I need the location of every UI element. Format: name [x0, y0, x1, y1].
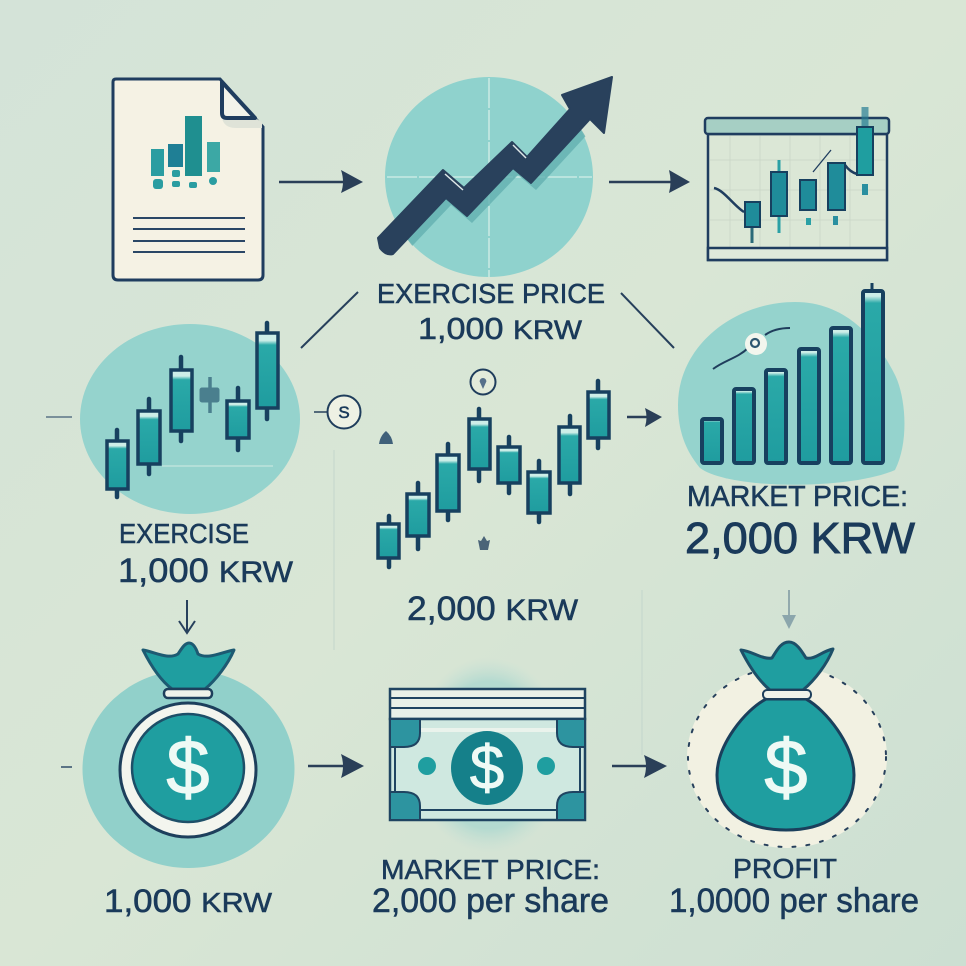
note corners	[390, 719, 585, 820]
connector line left	[301, 292, 358, 348]
panel: market price bar chart	[678, 283, 904, 485]
text: exercise price 1,000 KRW: 1,000 KRW	[418, 311, 583, 346]
squiggle with badge	[713, 328, 790, 369]
candlestick chart middle	[378, 381, 609, 567]
panel: left candlestick circle	[80, 323, 300, 514]
text: market price per share: MARKET PRICE:	[381, 854, 600, 885]
arrow: bill to profit	[612, 755, 667, 778]
icon: small bell	[379, 431, 393, 444]
panel: growth arrow circle	[378, 77, 612, 277]
icon: rising arrow	[378, 77, 612, 254]
connector line right	[621, 293, 674, 348]
text: exercise price 1,000 KRW	[377, 278, 605, 346]
text: profit per share: 1,0000 per share	[669, 882, 919, 920]
board candlesticks	[745, 107, 873, 243]
dollar sign: $	[470, 734, 504, 803]
text: exercise 1,000 KRW: 1,000 KRW	[118, 552, 294, 590]
text: market price 2,000 KRW	[685, 481, 915, 563]
dollar sign: $	[166, 723, 210, 811]
text: profit per share	[669, 853, 919, 920]
dollar sign: $	[764, 723, 808, 811]
panel: coin money bag	[82, 643, 294, 868]
arrow: growth to chart	[609, 170, 690, 193]
arrow: middle chart to bars	[627, 408, 662, 427]
dash left of row two	[46, 416, 72, 418]
panel: candlestick board	[705, 107, 889, 260]
icon: dollar coin badge: S	[338, 403, 350, 422]
text: exercise price 1,000 KRW: EXERCISE PRICE	[377, 278, 605, 309]
icon: small leaf	[478, 536, 490, 550]
icon: small pin badge	[470, 370, 496, 394]
document bar chart	[151, 116, 220, 189]
panel: document icon	[113, 79, 263, 280]
document text lines	[133, 218, 245, 252]
text: exercise 1,000 KRW: EXERCISE	[119, 518, 249, 549]
text: market price 2,000 KRW: MARKET PRICE:	[687, 481, 908, 513]
text: exercise 1,000 KRW	[118, 518, 294, 590]
text: market price 2,000 KRW: 2,000 KRW	[685, 514, 915, 563]
panel: banknote	[390, 657, 585, 853]
bars	[702, 283, 883, 463]
dash left of row three	[61, 766, 72, 768]
arrow: down left	[179, 600, 195, 633]
icon: dollar coin badge	[314, 396, 360, 428]
text: 1,000 KRW bottom: 1,000 KRW	[104, 883, 273, 919]
text: 2,000 KRW middle: 2,000 KRW	[407, 590, 579, 628]
arrow: coin to bill	[308, 754, 364, 778]
arrow: document to growth	[279, 170, 363, 193]
panel: profit money bag	[687, 642, 887, 848]
candlestick group left	[107, 323, 278, 497]
text: market price per share: 2,000 per share	[372, 882, 609, 920]
text: profit per share: PROFIT	[733, 853, 837, 884]
text: market price per share	[372, 854, 609, 920]
arrow: down right	[782, 590, 796, 629]
